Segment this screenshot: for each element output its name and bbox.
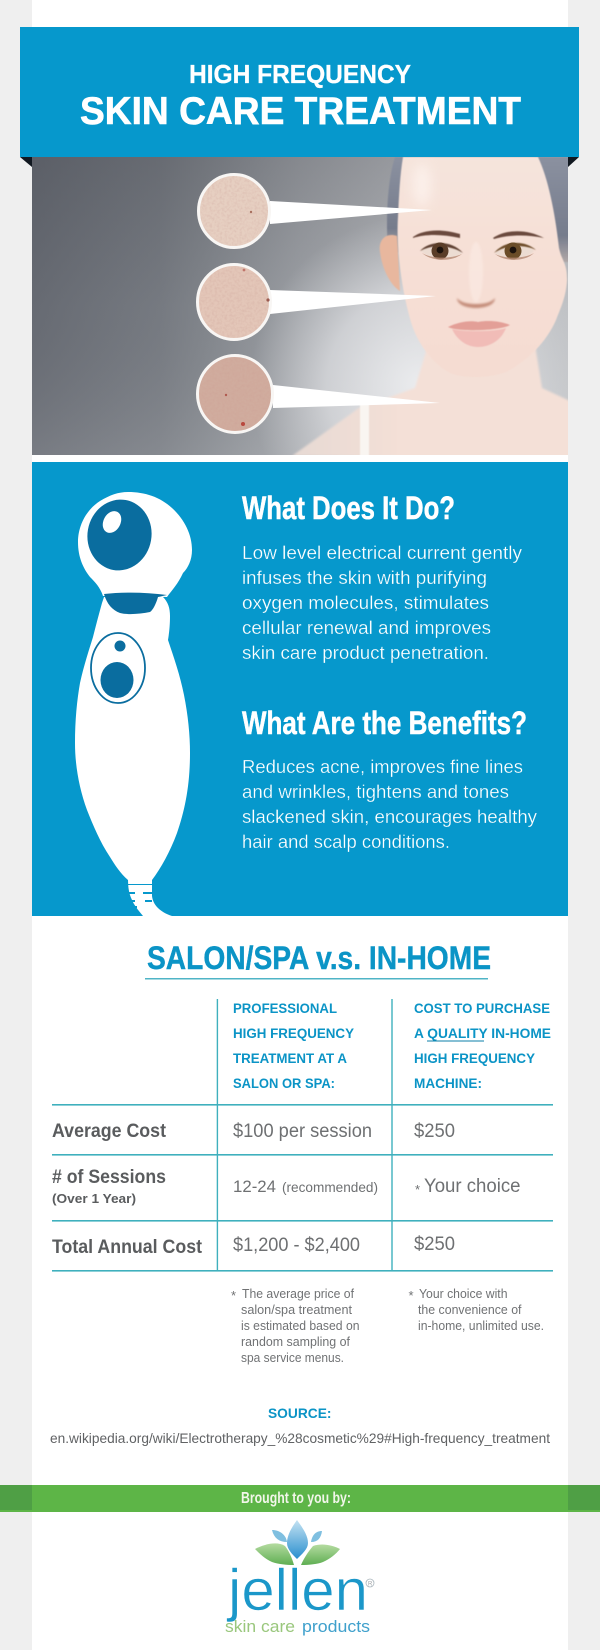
skin close-up 3 bbox=[198, 356, 272, 432]
text block: what it does: oxygen molecules, stimulates bbox=[242, 593, 489, 613]
source: en.wikipedia.org/wiki/Electrotherapy_%28cosmetic%29#High-frequency_treatment bbox=[50, 1430, 550, 1446]
column header: in-home: A QUALITY IN-HOME bbox=[414, 1026, 551, 1041]
row: number of sessions: (recommended) bbox=[282, 1180, 378, 1195]
heading: what does it do: What Does It Do? bbox=[242, 490, 455, 526]
text block: benefits: hair and scalp conditions. bbox=[242, 832, 450, 852]
logo tagline: products bbox=[302, 1617, 370, 1636]
device head bbox=[78, 492, 192, 597]
row: number of sessions bbox=[52, 1167, 520, 1206]
device controls bbox=[91, 633, 145, 703]
registered mark bbox=[366, 1579, 374, 1588]
registered mark: R bbox=[368, 1582, 373, 1588]
device body bbox=[75, 597, 190, 880]
ear bbox=[380, 235, 400, 291]
row: total annual cost: Total Annual Cost bbox=[52, 1237, 203, 1258]
row: total annual cost: $250 bbox=[414, 1234, 455, 1255]
logo wordmark: jellen bbox=[226, 1558, 368, 1623]
nose bbox=[457, 242, 495, 308]
title line 1: HIGH FREQUENCY bbox=[189, 59, 411, 89]
device collar bbox=[104, 593, 167, 614]
logo mark bbox=[255, 1520, 340, 1565]
footnote: salon pricing: spa service menus. bbox=[241, 1351, 344, 1365]
row: number of sessions: (Over 1 Year) bbox=[52, 1191, 136, 1206]
device lens bbox=[82, 494, 157, 576]
text block: what it does: infuses the skin with purifying bbox=[242, 568, 487, 588]
source bbox=[50, 1405, 550, 1446]
title line 2: SKIN CARE TREATMENT bbox=[80, 90, 521, 133]
title banner bbox=[20, 27, 579, 167]
row: average cost: $100 per session bbox=[233, 1121, 372, 1142]
text block: benefits: slackened skin, encourages healthy bbox=[242, 807, 537, 827]
row: number of sessions: * bbox=[415, 1182, 420, 1197]
comparison table bbox=[52, 999, 553, 1272]
text block: what it does: Low level electrical current gently bbox=[242, 543, 522, 563]
text block: benefits: Reduces acne, improves fine lines bbox=[242, 757, 523, 777]
footnote: your choice bbox=[408, 1287, 544, 1333]
footnote: salon pricing: salon/spa treatment bbox=[241, 1303, 353, 1317]
column header: in-home: HIGH FREQUENCY bbox=[414, 1051, 535, 1066]
row: total annual cost: $1,200 - $2,400 bbox=[233, 1235, 360, 1256]
hero photo: woman's face with skin close-ups bbox=[32, 157, 572, 458]
footnote: salon pricing bbox=[231, 1287, 360, 1365]
green sponsor bar bbox=[0, 1485, 600, 1512]
right eye bbox=[494, 242, 536, 260]
footnote: salon pricing: random sampling of bbox=[241, 1335, 351, 1349]
column header: in-home bbox=[414, 1001, 551, 1091]
text block: what it does bbox=[242, 543, 522, 663]
logo tagline bbox=[225, 1617, 370, 1636]
row: total annual cost bbox=[52, 1234, 455, 1258]
chest and neck bbox=[292, 345, 572, 458]
row: number of sessions: 12-24 bbox=[233, 1177, 276, 1196]
row: number of sessions: Your choice bbox=[424, 1176, 520, 1197]
footnote: your choice: Your choice with bbox=[419, 1287, 508, 1301]
footnote: salon pricing: * bbox=[231, 1288, 236, 1303]
text block: benefits: and wrinkles, tightens and tones bbox=[242, 782, 509, 802]
column header: salon: SALON OR SPA: bbox=[233, 1076, 335, 1091]
left eye bbox=[420, 242, 463, 260]
footnote: your choice: the convenience of bbox=[418, 1303, 522, 1317]
column header: salon: PROFESSIONAL bbox=[233, 1001, 337, 1016]
logo: jellen skin care products bbox=[225, 1520, 374, 1636]
device cord bbox=[128, 878, 172, 916]
eyebrows bbox=[413, 230, 544, 239]
face shape bbox=[396, 157, 568, 351]
column header: salon: HIGH FREQUENCY bbox=[233, 1026, 354, 1041]
text block: benefits bbox=[242, 757, 537, 852]
row: average cost: Average Cost bbox=[52, 1121, 167, 1142]
column header: salon: TREATMENT AT A bbox=[233, 1051, 347, 1066]
skin close-up 2 bbox=[198, 264, 270, 340]
heading: benefits: What Are the Benefits? bbox=[242, 705, 527, 741]
text block: what it does: skin care product penetration. bbox=[242, 643, 489, 663]
green sponsor bar: Brought to you by: bbox=[241, 1490, 351, 1507]
column header: in-home: MACHINE: bbox=[414, 1076, 482, 1091]
row: average cost bbox=[52, 1121, 455, 1142]
column header: salon bbox=[233, 1001, 354, 1091]
panel: what it does and benefits bbox=[32, 462, 568, 916]
footnote: salon pricing: is estimated based on bbox=[241, 1319, 360, 1333]
heading: salon vs in-home: SALON/SPA v.s. IN-HOME bbox=[147, 940, 491, 976]
skin close-up 1 bbox=[198, 174, 270, 248]
footnote: your choice: * bbox=[408, 1288, 414, 1303]
footnote: your choice: in-home, unlimited use. bbox=[418, 1319, 544, 1333]
source: SOURCE: bbox=[268, 1405, 332, 1421]
footnote: salon pricing: The average price of bbox=[242, 1287, 355, 1301]
text block: what it does: cellular renewal and improves bbox=[242, 618, 491, 638]
row: average cost: $250 bbox=[414, 1121, 455, 1142]
column header: in-home: COST TO PURCHASE bbox=[414, 1001, 550, 1016]
pointers bbox=[270, 201, 440, 408]
lips bbox=[448, 321, 510, 347]
row: number of sessions: # of Sessions bbox=[52, 1167, 166, 1188]
hair bbox=[387, 157, 570, 262]
icon: high frequency device bbox=[75, 492, 192, 916]
logo tagline: skin care bbox=[225, 1617, 295, 1636]
